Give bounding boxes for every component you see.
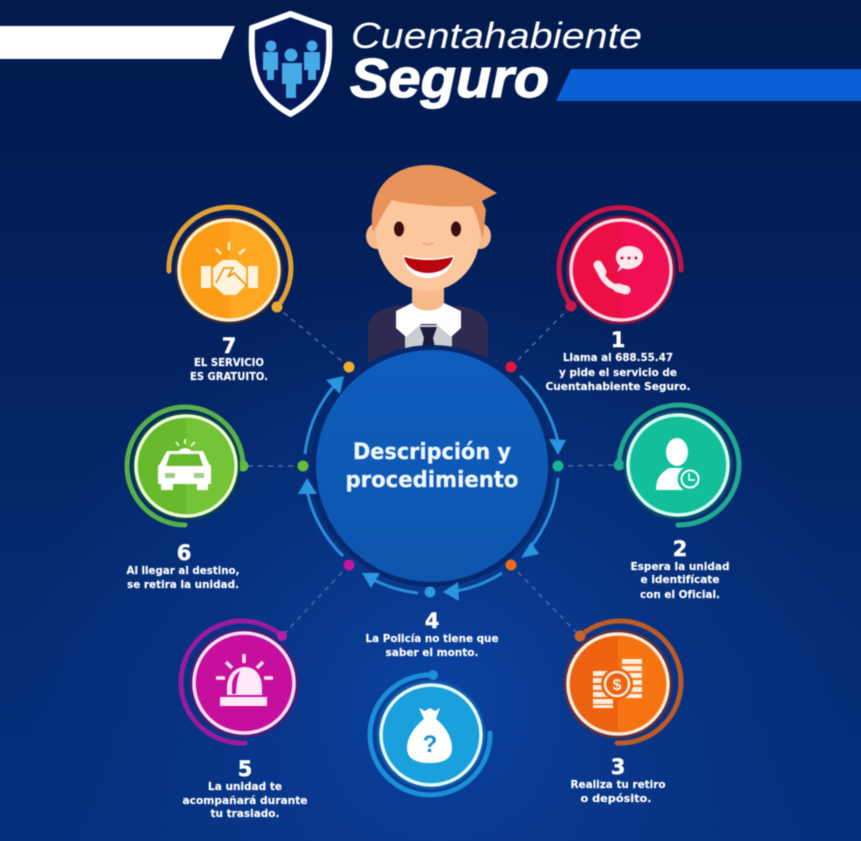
icon: handshake — [201, 242, 258, 295]
step 5 text: acompañará durante — [182, 795, 308, 807]
step 3 text: o depósito. — [580, 793, 652, 805]
step 4 text: La Policía no tiene que — [366, 633, 498, 645]
step 1 text: Llama al 688.55.47 — [563, 352, 673, 364]
icon: siren light — [216, 654, 273, 706]
step 2 text: 2 — [673, 537, 687, 561]
step 2 — [614, 405, 739, 601]
title: Cuentahabiente — [351, 15, 642, 56]
ring nodes — [298, 362, 564, 598]
step 5 text: La unidad te — [208, 781, 282, 793]
central label: procedimiento — [346, 468, 518, 493]
step 1 text: 1 — [611, 328, 625, 352]
badge: red phone — [559, 208, 681, 324]
step 1 — [546, 208, 690, 393]
step 2 text: e identifícate — [640, 574, 720, 586]
central circle — [311, 345, 553, 587]
step 5 text: 5 — [238, 757, 252, 781]
character: smiling man — [366, 165, 497, 365]
badge: teal person and clock — [614, 405, 739, 525]
icon: taxi car — [158, 439, 211, 490]
step 5 text: tu traslado. — [210, 808, 280, 820]
step 3 text: 3 — [611, 755, 625, 779]
step 2 text — [630, 537, 730, 601]
step 2 text: Espera la unidad — [630, 561, 730, 573]
icon: money bag: ? — [423, 731, 437, 758]
icon: phone and speech bubble — [598, 246, 643, 290]
step 7 text — [190, 334, 268, 383]
step 7 text: EL SERVICIO — [194, 357, 264, 369]
step 1 text: Cuentahabiente Seguro. — [546, 381, 690, 393]
blue banner bar — [556, 69, 861, 101]
badge: yellow handshake — [169, 207, 291, 324]
central label — [346, 440, 518, 493]
step 6 — [126, 407, 248, 591]
step 3 — [564, 621, 681, 805]
step 7 text: ES GRATUITO. — [190, 371, 268, 383]
step 4 text: saber el monto. — [386, 647, 478, 659]
badge: magenta siren — [181, 621, 298, 743]
title: Seguro — [350, 47, 549, 109]
badge: green taxi — [127, 407, 248, 525]
badge: orange coins — [564, 621, 681, 743]
step 6 text: se retira la unidad. — [127, 579, 239, 591]
step 5 — [181, 621, 308, 820]
icon: person with clock — [656, 438, 702, 492]
step 4 text — [366, 609, 498, 659]
step 6 text — [126, 541, 240, 591]
header — [0, 14, 861, 114]
step 5 text — [182, 757, 308, 820]
step 6 text: 6 — [177, 541, 191, 565]
title — [350, 15, 642, 109]
step 4 — [366, 609, 498, 795]
step 2 text: con el Oficial. — [640, 589, 720, 601]
step 1 text: y pide el servicio de — [559, 367, 677, 379]
icon: shield with people — [252, 14, 329, 114]
step 4 text: 4 — [425, 609, 439, 633]
central label: Descripción y — [353, 440, 511, 465]
white banner bar — [0, 26, 235, 59]
step 1 text — [546, 328, 690, 393]
badge: blue money bag — [370, 670, 490, 795]
circular flow arrows — [298, 376, 566, 601]
dashed connectors — [243, 306, 619, 636]
step 7 text: 7 — [222, 334, 236, 358]
step 3 text: Realiza tu retiro — [570, 779, 666, 791]
icon: stacks of coins: $ — [613, 677, 622, 694]
step 6 text: Al llegar al destino, — [126, 565, 240, 577]
step 3 text — [570, 755, 666, 805]
step 7 — [169, 207, 291, 383]
